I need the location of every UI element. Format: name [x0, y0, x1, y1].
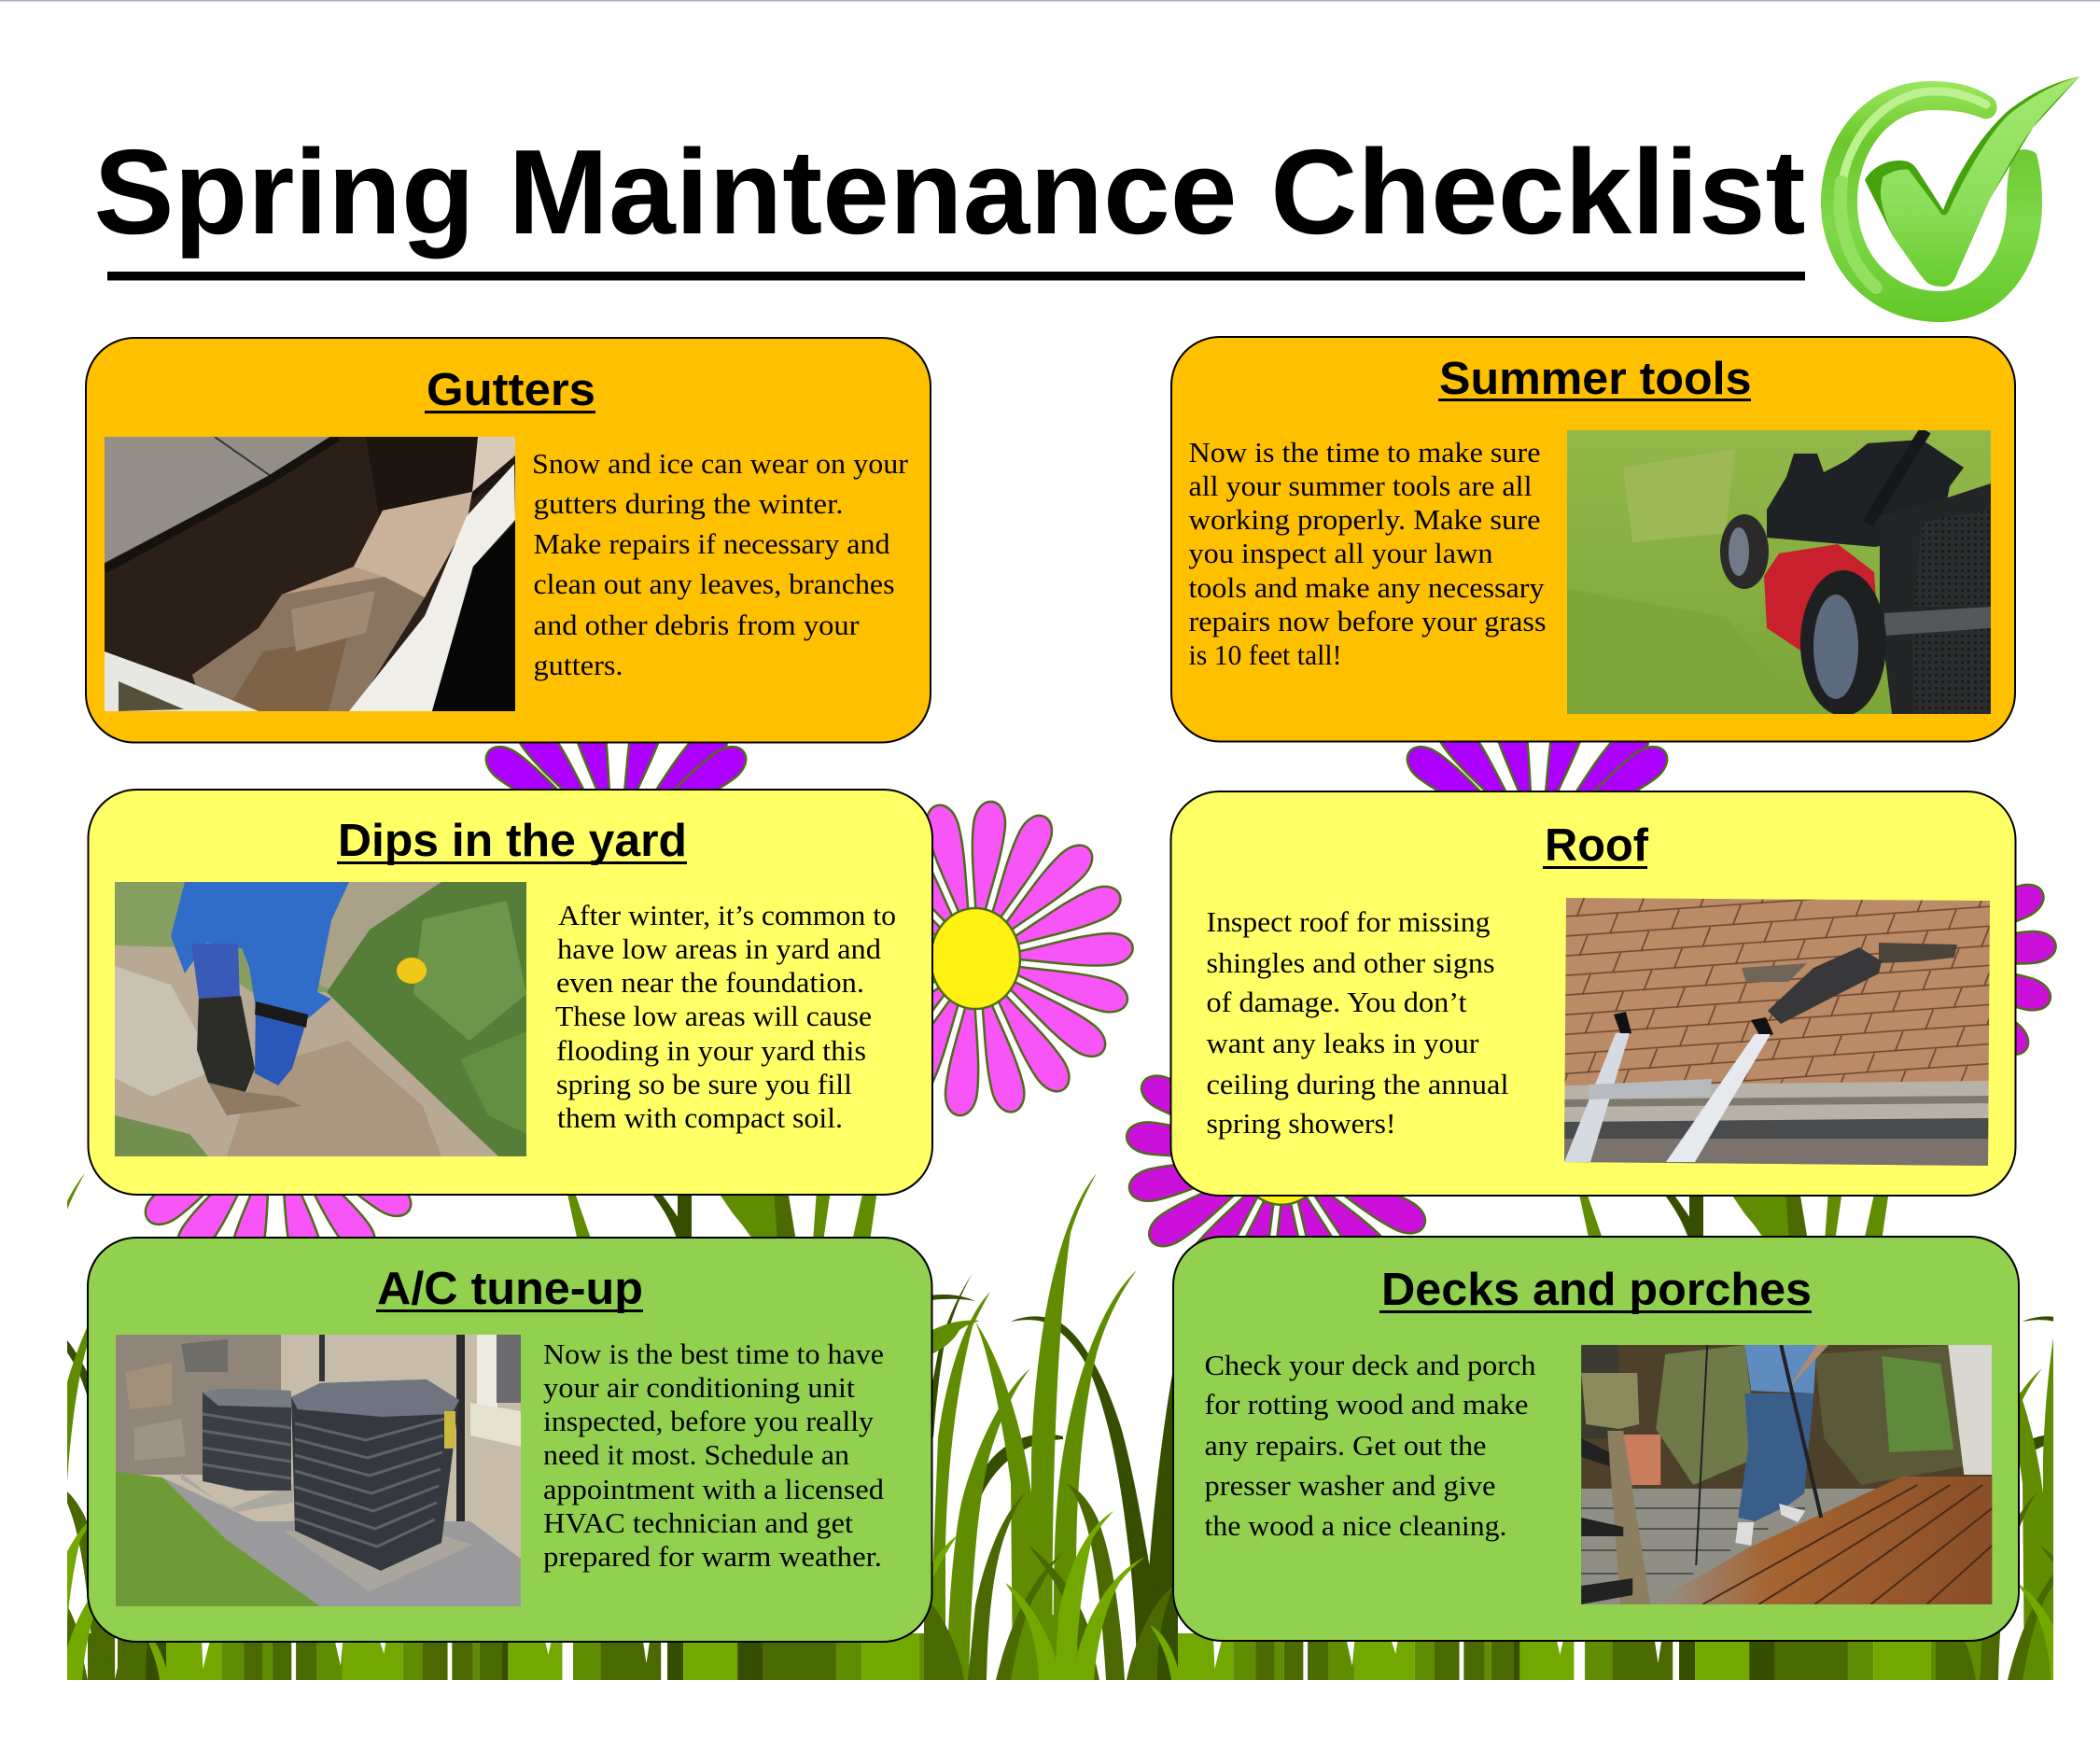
- text: dips in the yard: flooding in your yard this: [556, 1034, 866, 1067]
- heading: gutters: Gutters: [427, 365, 595, 415]
- text: a/c tune-up: Now is the best time to have: [543, 1337, 884, 1370]
- text: decks and porches: any repairs. Get out the: [1204, 1429, 1486, 1462]
- photo: lawn mower on grass: [1567, 430, 1991, 714]
- text: gutters: and other debris from your: [534, 609, 860, 641]
- flower: pink below dips panel: [138, 1132, 417, 1283]
- heading: dips in the yard: Dips in the yard: [338, 816, 687, 866]
- photo: air conditioning units: [116, 1335, 521, 1606]
- text: a/c tune-up: appointment with a licensed: [543, 1473, 885, 1505]
- text: decks and porches: presser washer and give: [1204, 1469, 1495, 1502]
- panel: roof: [1170, 791, 2016, 1196]
- text: roof: want any leaks in your: [1206, 1027, 1479, 1059]
- heading: roof: Roof: [1545, 820, 1649, 871]
- text: dips in the yard: spring so be sure you fill: [556, 1068, 852, 1100]
- text: gutters: Make repairs if necessary and: [534, 527, 890, 560]
- text: roof: [1206, 905, 1508, 1140]
- text: summer tools: you inspect all your lawn: [1189, 537, 1493, 569]
- text: summer tools: working properly. Make sure: [1189, 503, 1540, 536]
- panel: gutters: [86, 338, 931, 743]
- text: gutters: [532, 447, 909, 681]
- text: a/c tune-up: HVAC technician and get: [543, 1506, 853, 1539]
- text: dips in the yard: [555, 899, 896, 1134]
- panel: dips in the yard: [88, 790, 932, 1195]
- icon: green check mark: [1821, 77, 2079, 322]
- text: summer tools: repairs now before your grass: [1189, 605, 1546, 637]
- text: roof: shingles and other signs: [1206, 946, 1495, 979]
- text: decks and porches: Check your deck and porch: [1204, 1349, 1536, 1381]
- photo: damaged roof with ladder: [1564, 898, 1994, 1169]
- text: roof: ceiling during the annual: [1206, 1068, 1508, 1100]
- text: dips in the yard: have low areas in yard and: [557, 932, 882, 965]
- text: dips in the yard: These low areas will cause: [555, 1000, 872, 1032]
- heading: decks and porches: Decks and porches: [1381, 1265, 1812, 1315]
- panel: a/c tune-up: [88, 1238, 931, 1642]
- flower: purple behind gutters panel: [479, 688, 753, 836]
- photo: gutter full of leaves: [105, 437, 515, 711]
- text: gutters: clean out any leaves, branches: [534, 567, 894, 600]
- text: summer tools: Now is the time to make sure: [1189, 436, 1540, 469]
- text: a/c tune-up: your air conditioning unit: [543, 1371, 855, 1404]
- panel: decks and porches: [1173, 1237, 2019, 1641]
- title rule: [107, 272, 1805, 280]
- text: a/c tune-up: prepared for warm weather.: [543, 1540, 882, 1573]
- flower: large pink beside dips panel: [817, 800, 1134, 1117]
- text: dips in the yard: even near the foundation.: [556, 966, 864, 999]
- text: dips in the yard: them with compact soil.: [557, 1101, 843, 1134]
- heading: summer tools: Summer tools: [1439, 354, 1751, 404]
- text: a/c tune-up: [543, 1337, 885, 1573]
- text: decks and porches: for rotting wood and make: [1204, 1388, 1529, 1421]
- text: gutters: gutters during the winter.: [534, 487, 844, 520]
- text: roof: spring showers!: [1206, 1107, 1396, 1140]
- photo: pressure washing a deck: [1581, 1345, 1992, 1604]
- text: a/c tune-up: inspected, before you really: [543, 1405, 875, 1437]
- text: gutters: Snow and ice can wear on your: [532, 447, 909, 480]
- text: decks and porches: [1204, 1349, 1536, 1542]
- title: Spring Maintenance Checklist: [93, 125, 1805, 259]
- text: summer tools: is 10 feet tall!: [1189, 638, 1342, 671]
- text: dips in the yard: After winter, it’s common to: [558, 899, 896, 931]
- flower: magenta below roof panel: [1098, 969, 1469, 1340]
- text: gutters: gutters.: [534, 649, 623, 681]
- heading: a/c tune-up: A/C tune-up: [377, 1264, 643, 1314]
- text: summer tools: [1189, 436, 1546, 671]
- text: summer tools: all your summer tools are all: [1189, 469, 1533, 502]
- photo: boots in muddy yard: [115, 882, 526, 1156]
- grass border: [0, 1173, 2100, 1680]
- flower: purple behind summer tools panel: [1400, 688, 1674, 836]
- text: roof: Inspect roof for missing: [1206, 905, 1490, 938]
- text: a/c tune-up: need it most. Schedule an: [543, 1438, 850, 1471]
- text: summer tools: tools and make any necessary: [1189, 571, 1545, 604]
- text: decks and porches: the wood a nice cleaning.: [1204, 1509, 1506, 1542]
- flower: magenta right of roof panel: [1740, 798, 2057, 1115]
- panel: summer tools: [1171, 337, 2015, 741]
- text: roof: of damage. You don’t: [1206, 986, 1467, 1018]
